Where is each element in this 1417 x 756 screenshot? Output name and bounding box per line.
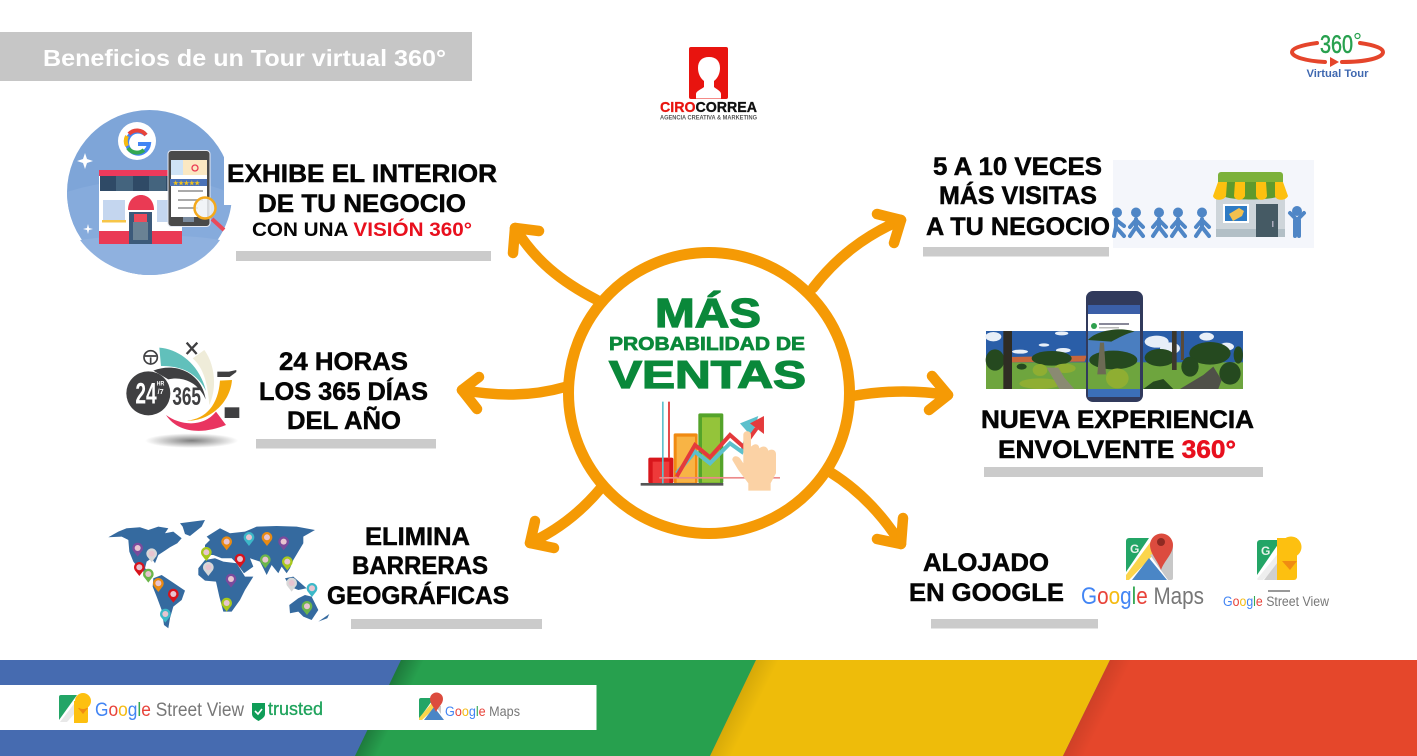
icon: 24/7 365 emblem: HR xyxy=(157,381,164,388)
arrow: to left benefit xyxy=(462,377,565,409)
heading: LOS 365 DÍAS xyxy=(259,377,428,406)
title banner: Beneficios de un Tour virtual 360° xyxy=(43,45,446,71)
panel: elimina barreras xyxy=(108,520,542,629)
label: trusted: trusted xyxy=(268,699,323,719)
icon: Google Maps logo: Google Maps xyxy=(1081,583,1204,610)
footer logo strip xyxy=(0,685,596,730)
icon: Street View mini logo xyxy=(59,693,91,723)
arrow: to bottom-right benefit xyxy=(830,472,903,544)
heading: EN GOOGLE xyxy=(909,579,1064,607)
logo: 360 virtual tour: 360 xyxy=(1320,31,1353,59)
arrow: to right benefit xyxy=(853,376,948,410)
underline xyxy=(923,247,1109,256)
central heading: PROBABILIDAD DE xyxy=(609,333,805,354)
panel: 24 horas xyxy=(126,343,436,448)
heading xyxy=(259,348,428,435)
arrow: to top-right benefit xyxy=(813,214,901,288)
central heading xyxy=(609,290,806,397)
heading: ALOJADO xyxy=(923,549,1049,577)
icon: Google Street View logo xyxy=(1223,536,1329,609)
map pins xyxy=(132,532,317,623)
icon: shop with Google listing xyxy=(67,110,244,275)
icon: Maps mini logo xyxy=(419,693,444,720)
logo: Ciro Correa: CIROCORREA xyxy=(660,99,757,116)
icon: trusted shield xyxy=(252,703,265,721)
underline xyxy=(351,619,542,629)
icon: queue of people to shop xyxy=(1112,160,1314,248)
icon: world map with pins xyxy=(108,520,329,628)
label: Google Maps: Google Maps xyxy=(445,704,520,719)
heading: ENVOLVENTE 360° xyxy=(998,436,1236,464)
icon: 24/7 365 emblem: 24 xyxy=(135,377,157,410)
heading: EXHIBE EL INTERIOR xyxy=(227,160,497,188)
label: Google Street View: Google Street View xyxy=(95,700,244,721)
icon: 24/7 365 emblem xyxy=(126,343,239,448)
icon: Google Street View logo: G xyxy=(1261,544,1270,558)
central heading: VENTAS xyxy=(609,354,806,397)
icon: growth chart with hand xyxy=(641,402,780,491)
heading: GEOGRÁFICAS xyxy=(327,581,509,610)
arrow: to bottom-left benefit xyxy=(530,488,601,548)
icon: Google Maps logo: G xyxy=(1130,542,1139,556)
heading: 5 A 10 VECES xyxy=(933,153,1102,181)
icon: Google Maps logo xyxy=(1081,534,1204,610)
logo: 360 virtual tour xyxy=(1292,31,1383,80)
icon: shop with Google listing: ★★★★★ xyxy=(173,180,201,187)
underline xyxy=(236,251,491,261)
heading xyxy=(909,549,1064,607)
heading: CON UNA VISIÓN 360° xyxy=(252,217,472,241)
icon: 24/7 365 emblem: /7 xyxy=(158,387,164,396)
logo: Ciro Correa xyxy=(660,47,757,122)
underline xyxy=(984,467,1263,477)
panel: experiencia envolvente xyxy=(981,291,1263,477)
heading: DE TU NEGOCIO xyxy=(258,190,466,218)
heading xyxy=(926,153,1110,241)
image: panorama with phone xyxy=(985,291,1243,402)
heading: BARRERAS xyxy=(352,552,488,580)
underline xyxy=(931,619,1098,628)
underline xyxy=(256,439,436,448)
heading xyxy=(327,523,509,610)
heading: A TU NEGOCIO xyxy=(926,213,1110,241)
heading xyxy=(227,160,497,241)
logo: 360 virtual tour: Virtual Tour xyxy=(1306,68,1369,80)
icon: 24/7 365 emblem: 365 xyxy=(172,383,201,411)
title banner xyxy=(0,32,472,81)
footer colour band xyxy=(0,660,1417,756)
heading: MÁS VISITAS xyxy=(939,181,1097,210)
panel: alojado en google xyxy=(909,534,1329,628)
arrow: to top-left benefit xyxy=(513,228,597,300)
heading: ELIMINA xyxy=(365,523,470,551)
heading: 24 HORAS xyxy=(279,348,408,376)
heading: NUEVA EXPERIENCIA xyxy=(981,406,1254,434)
icon: Google Street View logo: Google Street View xyxy=(1223,594,1329,609)
central heading: MÁS xyxy=(655,290,761,336)
heading: DEL AÑO xyxy=(287,405,401,435)
heading xyxy=(981,406,1254,464)
logo: Ciro Correa: AGENCIA CREATIVA & MARKETING xyxy=(660,116,757,122)
central circle xyxy=(568,252,850,534)
panel: mas visitas xyxy=(923,153,1314,256)
panel: exhibe el interior xyxy=(67,110,497,275)
